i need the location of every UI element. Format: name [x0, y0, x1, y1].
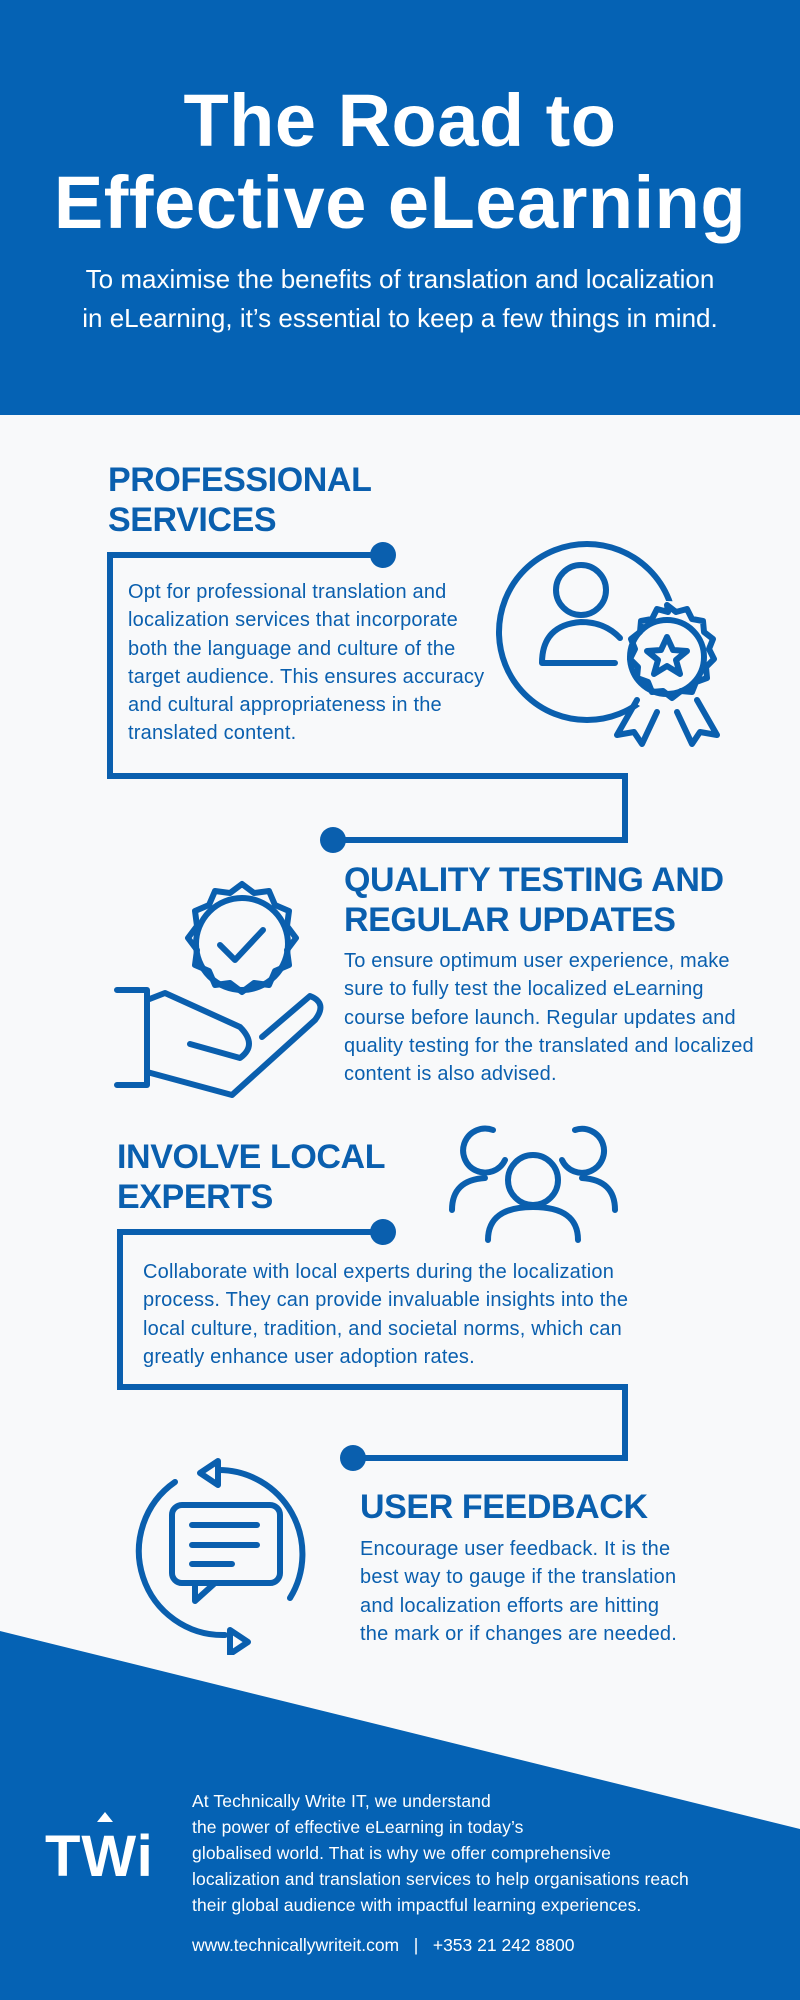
title: Effective eLearning [54, 161, 746, 244]
text: quality testing: quality testing for the translated and localized [344, 1035, 754, 1057]
title: The Road to [183, 79, 617, 162]
text: professional services [128, 581, 484, 744]
heading: professional services: PROFESSIONAL [108, 461, 371, 499]
text: quality testing [344, 950, 754, 1085]
title [54, 79, 746, 244]
logo: TWi: TWi [45, 1824, 154, 1889]
footer text: their global audience with impactful learning experiences. [192, 1895, 641, 1915]
heading: involve local experts: EXPERTS [117, 1178, 273, 1216]
text: professional services: localization services that incorporate [128, 609, 458, 631]
text: professional services: translated content. [128, 722, 296, 744]
header band [0, 0, 800, 415]
text: professional services: Opt for professional translation and [128, 581, 446, 603]
icon: person with award [496, 541, 720, 747]
text: professional services: both the language and culture of the [128, 638, 455, 660]
text: user feedback: Encourage user feedback. It is the [360, 1538, 670, 1560]
text: involve local experts: process. They can provide invaluable insights into the [143, 1289, 628, 1311]
text: quality testing: To ensure optimum user experience, make [344, 950, 730, 972]
text: involve local experts [143, 1261, 628, 1368]
footer text [192, 1791, 689, 1915]
heading: quality testing: REGULAR UPDATES [344, 901, 676, 939]
icon: feedback cycle [136, 1458, 306, 1655]
contact line: www.technicallywriteit.com | +353 21 242 8800 [192, 1935, 574, 1955]
text: quality testing: course before launch. Regular updates and [344, 1007, 736, 1029]
heading: quality testing [344, 861, 724, 939]
subtitle: in eLearning, it’s essential to keep a few things in mind. [82, 303, 718, 333]
heading: user feedback: USER FEEDBACK [360, 1488, 648, 1526]
heading: quality testing: QUALITY TESTING AND [344, 861, 724, 899]
text: involve local experts: local culture, tradition, and societal norms, which can [143, 1318, 622, 1340]
text: user feedback: the mark or if changes are needed. [360, 1623, 677, 1645]
text: user feedback: best way to gauge if the translation [360, 1566, 676, 1588]
footer text: the power of effective eLearning in today’s [192, 1817, 524, 1837]
footer blue diagonal band [0, 1631, 800, 2000]
heading: professional services: SERVICES [108, 501, 276, 539]
text: user feedback: and localization efforts are hitting [360, 1595, 659, 1617]
icon: people group [449, 1126, 618, 1243]
subtitle [82, 264, 718, 333]
heading: involve local experts: INVOLVE LOCAL [117, 1138, 385, 1176]
footer text: localization and translation services to help organisations reach [192, 1869, 689, 1889]
text: involve local experts: Collaborate with local experts during the localization [143, 1261, 614, 1283]
text: quality testing: sure to fully test the localized eLearning [344, 978, 704, 1000]
text: user feedback [360, 1538, 677, 1645]
text: quality testing: content is also advised. [344, 1063, 557, 1085]
heading: involve local experts [117, 1138, 385, 1216]
text: professional services: target audience. This ensures accuracy [128, 666, 484, 688]
footer text: At Technically Write IT, we understand [192, 1791, 491, 1811]
text: involve local experts: greatly enhance user adoption rates. [143, 1346, 475, 1368]
footer text: globalised world. That is why we offer comprehensive [192, 1843, 611, 1863]
text: professional services: and cultural appropriateness in the [128, 694, 442, 716]
heading: professional services [108, 461, 371, 539]
subtitle: To maximise the benefits of translation and localization [86, 264, 714, 294]
icon: hand with checked badge [114, 880, 324, 1098]
